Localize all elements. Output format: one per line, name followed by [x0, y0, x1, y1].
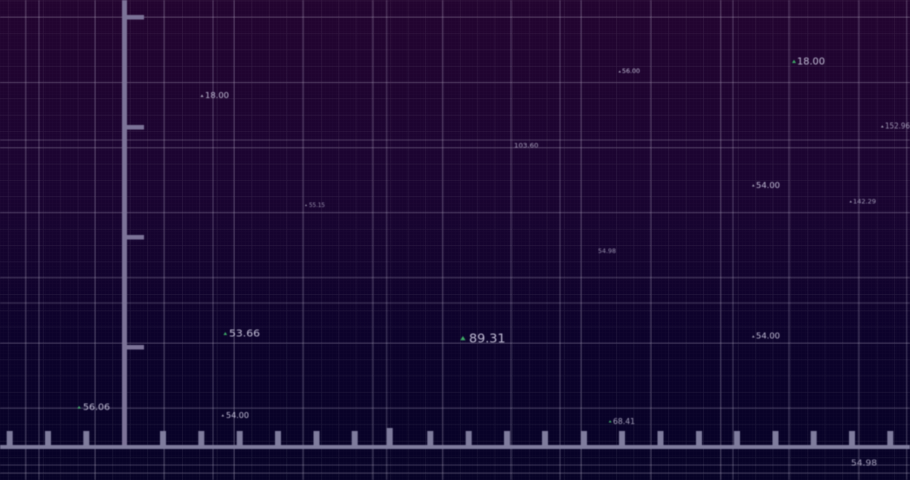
label: 54.00 bottom: 54.00: [226, 411, 249, 420]
label: 54.98 center: 54.98: [598, 248, 616, 255]
label: 68.41: 68.41: [613, 417, 635, 426]
label: 103.60: 103.60: [514, 141, 538, 149]
horizontal axis with ticks: [0, 428, 910, 449]
label: 18.00 left: 18.00: [205, 91, 229, 100]
vertical axis with ticks: [122, 0, 144, 447]
label: 56.00 top: 56.00: [622, 68, 640, 75]
label: 54.00 lower right: 54.00: [756, 332, 780, 341]
label: 54.00 upper right: 54.00: [756, 181, 780, 190]
label: 142.29: 142.29: [853, 198, 876, 206]
label: 89.31: 89.31: [469, 332, 506, 346]
label: 18.00 right: 18.00: [797, 56, 825, 68]
label: 54.98 bottom right: 54.98: [851, 458, 877, 467]
label: 56.06: 56.06: [83, 403, 110, 413]
data labels: [78, 56, 910, 467]
label: 55.15: 55.15: [309, 202, 325, 209]
label: 53.66: 53.66: [229, 329, 260, 340]
